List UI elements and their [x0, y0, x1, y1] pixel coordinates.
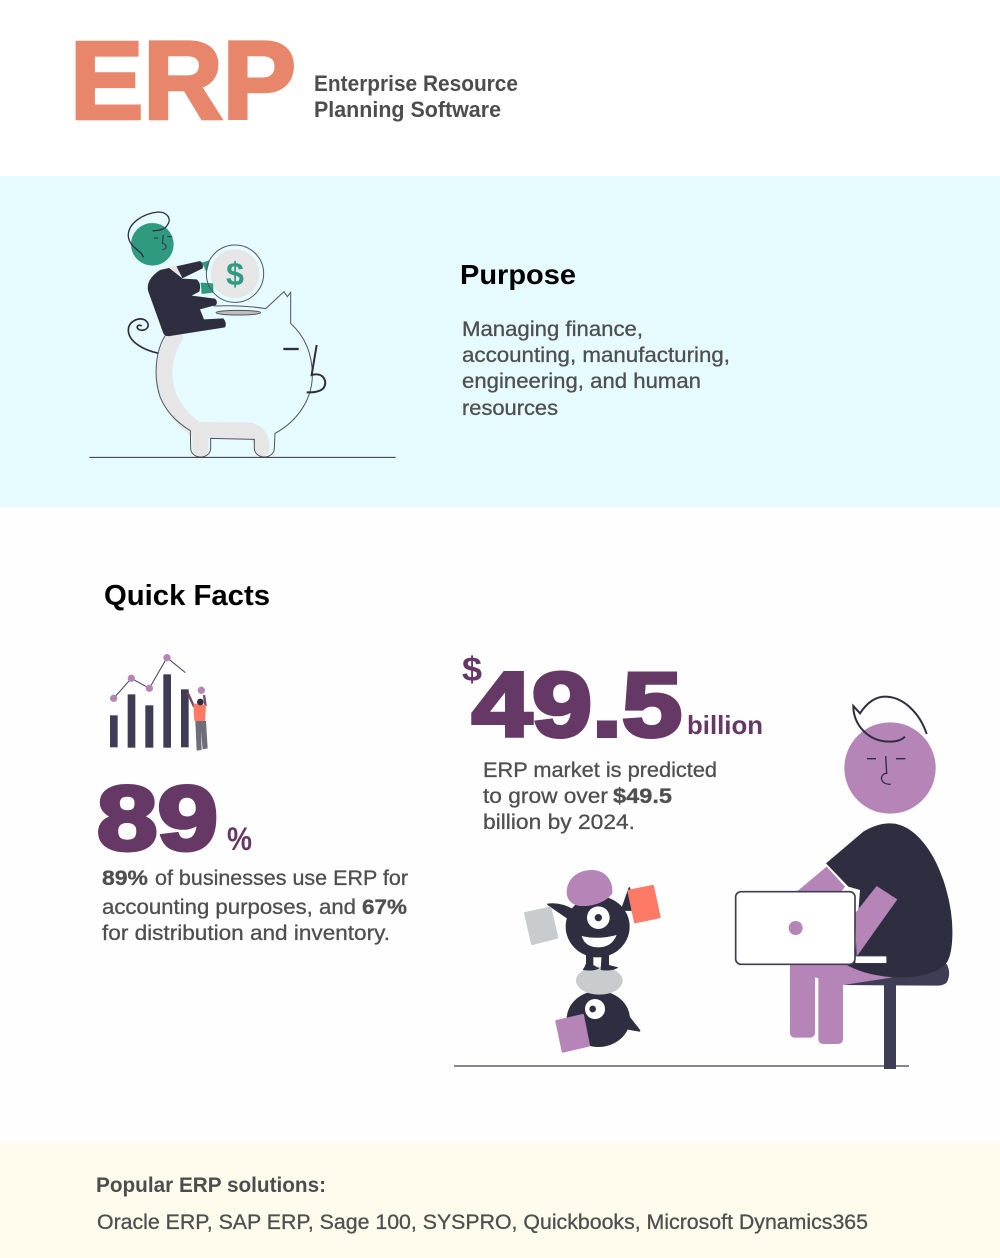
text: market description: to grow over: [483, 784, 608, 808]
heading: popular solutions: Popular ERP solutions:: [96, 1173, 326, 1197]
panel: popular ERP solutions: [0, 1142, 1000, 1258]
ground line: [454, 1065, 909, 1067]
subtitle: Enterprise Resource: [314, 71, 518, 96]
text: purpose description: accounting, manufacturing,: [462, 344, 730, 367]
stat: 49.5 billion: $: [462, 651, 482, 689]
stat: 89 percent: %: [227, 821, 252, 857]
text: 89 percent description: 67%: [362, 895, 407, 919]
text: purpose description: [462, 318, 730, 420]
text: 89 percent description: 89%: [102, 866, 148, 890]
text: purpose description: engineering, and human: [462, 370, 701, 393]
icon: person on piggy bank: [89, 212, 396, 457]
heading: Purpose: Purpose: [460, 259, 576, 290]
icon: person on piggy bank: $: [226, 256, 244, 292]
stat: 49.5 billion: 49.5: [472, 655, 682, 756]
stat: 89 percent: [97, 768, 252, 870]
icon: bar chart with person: [110, 654, 208, 751]
text: 89 percent description: for distribution and inventory.: [102, 921, 390, 945]
title: ERP: ERP: [70, 20, 296, 142]
text: 89 percent description: of businesses use ERP for: [155, 866, 408, 890]
text: market description: $49.5: [613, 784, 672, 808]
text: 89 percent description: [102, 866, 408, 945]
panel: purpose: [0, 176, 1000, 507]
icon: person with laptop: [736, 697, 952, 1069]
text: purpose description: resources: [462, 397, 558, 420]
stat: 49.5 billion: billion: [687, 710, 763, 740]
text: market description: billion by 2024.: [483, 810, 635, 834]
subtitle: [314, 71, 518, 122]
text: purpose description: Managing finance,: [462, 318, 643, 341]
icon: stacked monsters: [525, 870, 659, 1051]
text: market description: ERP market is predicted: [483, 758, 717, 782]
text: solutions list: Oracle ERP, SAP ERP, Sage 100, SYSPRO, Quickbooks, Microsoft Dynamics365: [97, 1210, 868, 1234]
text: market description: [483, 758, 717, 834]
stat: 49.5 billion: [462, 651, 763, 756]
subtitle: Planning Software: [314, 97, 501, 122]
heading: Quick Facts: Quick Facts: [104, 580, 270, 612]
stat: 89 percent: 89: [97, 768, 218, 870]
text: 89 percent description: accounting purposes, and: [102, 895, 356, 919]
